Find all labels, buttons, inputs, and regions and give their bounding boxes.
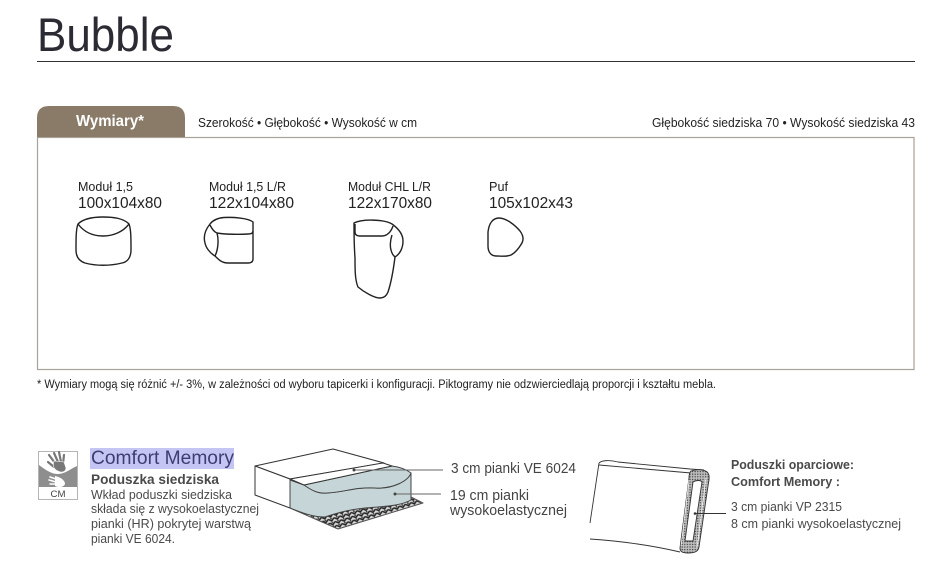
- module 1,5: [76, 180, 162, 265]
- callout: 3 cm foam: 3 cm pianki VE 6024: [451, 461, 576, 477]
- mesh base layer: [290, 497, 423, 529]
- foam core: [290, 473, 411, 517]
- tab: Wymiary: Wymiary*: [76, 113, 145, 130]
- seat dimensions: Głębokość siedziska 70 • Wysokość siedziska 43: [652, 115, 915, 130]
- module 1,5 L/R: [204, 180, 294, 263]
- text block: back cushions: Poduszki oparciowe:: [731, 458, 854, 472]
- text block: back cushions: 8 cm pianki wysokoelastycznej: [731, 516, 901, 531]
- title: Bubble: [37, 8, 174, 61]
- text block: seat cushion: Wkład poduszki siedziska: [91, 487, 233, 502]
- text block: seat cushion: składa się z wysokoelastycznej: [91, 501, 259, 516]
- puf: 105x102x43: [489, 195, 573, 212]
- footnote: * Wymiary mogą się różnić +/- 3%, w zależności od wyboru tapicerki i konfiguracji. Piktogramy nie odzwierciedlają proporcji i kształtu mebla.: [37, 379, 716, 391]
- text block: back cushions: Comfort Memory :: [731, 475, 840, 489]
- module 1,5 L/R: Moduł 1,5 L/R: [209, 180, 286, 194]
- icon: module CHL outline: [354, 220, 403, 298]
- puf: [488, 180, 573, 256]
- text block: seat cushion: pianki (HR) pokrytej warstwą: [91, 516, 252, 531]
- dimension legend: Szerokość • Głębokość • Wysokość w cm: [198, 115, 417, 130]
- module 1,5: Moduł 1,5: [78, 180, 133, 194]
- callout: 19 cm foam: [394, 487, 567, 519]
- module CHL L/R: Moduł CHL L/R: [348, 180, 431, 194]
- module 1,5 L/R: 122x104x80: [209, 195, 294, 212]
- top foam layer: [304, 466, 411, 493]
- cushion cross-section illustration: [255, 449, 423, 529]
- text block: back cushions: [731, 458, 901, 531]
- module 1,5: 100x104x80: [78, 195, 162, 212]
- heading: Comfort Memory: Comfort Memory: [91, 448, 234, 469]
- icon: module 1,5 L/R outline: [204, 217, 253, 263]
- text block: back cushions: 3 cm pianki VP 2315: [731, 499, 842, 514]
- callout line: back cushion: [694, 512, 726, 515]
- icon: comfort memory hands: CM: [50, 489, 66, 500]
- callout: 19 cm foam: wysokoelastycznej: [449, 502, 567, 519]
- back cushion illustration: [590, 461, 709, 553]
- text block: seat cushion: pianki VE 6024.: [91, 531, 175, 546]
- panel: dimensions: [37, 106, 915, 370]
- module CHL L/R: [348, 180, 432, 298]
- puf: Puf: [489, 180, 509, 194]
- module CHL L/R: 122x170x80: [348, 195, 432, 212]
- callout: 3 cm foam: [352, 461, 576, 477]
- text block: seat cushion: Poduszka siedziska: [91, 472, 219, 487]
- icon: module 1,5 outline: [76, 217, 131, 265]
- tab: Wymiary: [37, 106, 185, 137]
- callout: 19 cm foam: 19 cm pianki: [450, 487, 529, 504]
- text block: seat cushion: [91, 472, 259, 546]
- icon: puf outline: [488, 218, 523, 256]
- top strip: [290, 463, 392, 485]
- icon: comfort memory hands: [38, 452, 78, 500]
